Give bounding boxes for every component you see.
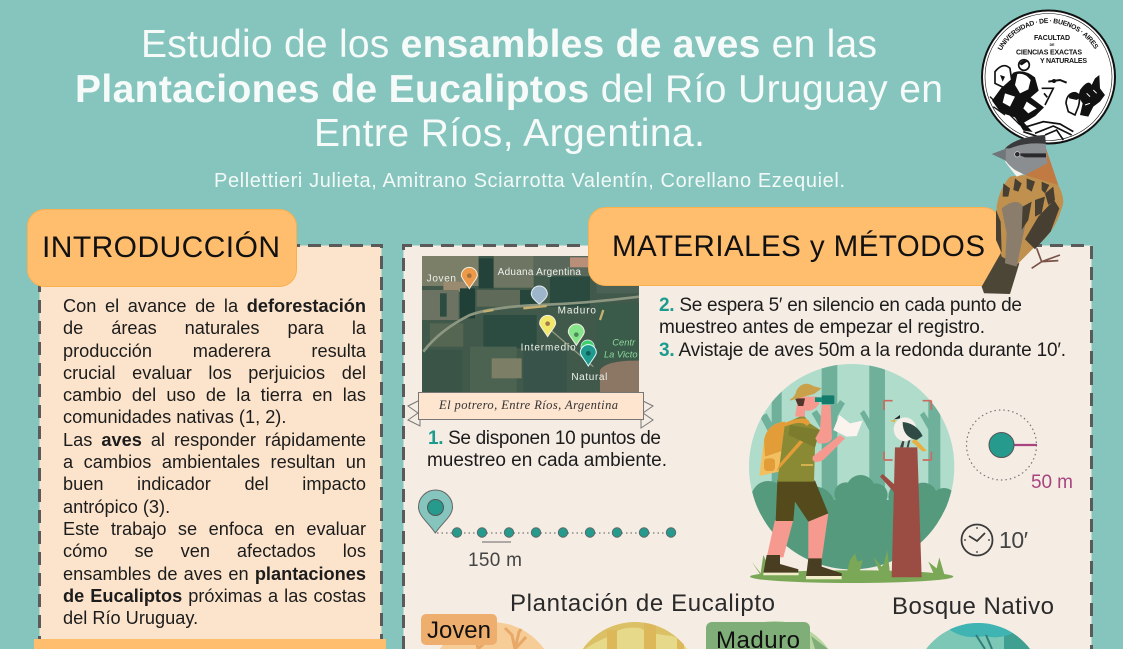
steps 2 and 3 text: 3. Avistaje de aves 50m a la redonda durante 10′.	[659, 340, 1066, 361]
habitat circle: intermedio	[582, 622, 687, 649]
logo: facultad de ciencias exactas y naturales	[981, 10, 1116, 144]
habitat circle: maduro	[765, 621, 828, 649]
text block: introducción: a cambios ambientales resultan un	[63, 452, 366, 472]
habitat circle: joven	[440, 622, 544, 649]
small bird	[890, 415, 927, 452]
label: joven: Joven	[427, 617, 491, 644]
map: el potrero: Joven	[427, 274, 456, 285]
heading: materiales y métodos	[588, 208, 1000, 286]
next section header band	[34, 639, 386, 649]
title: Entre Ríos, Argentina.	[314, 112, 705, 155]
text block: introducción: Las aves al responder rápidamente	[63, 430, 366, 450]
illustration: perched sparrow	[982, 135, 1063, 294]
text block: introducción: cómo se ven afectados los	[63, 541, 366, 561]
illustration: birdwatcher	[747, 360, 957, 583]
torso and arms	[777, 415, 820, 482]
map: el potrero: Aduana Argentina	[498, 267, 581, 278]
logo: facultad de ciencias exactas y naturales: DE	[1050, 43, 1055, 47]
backpack	[759, 422, 787, 476]
diagram: sampling transect	[418, 490, 676, 571]
text block: introducción: producción maderera resulta	[63, 341, 366, 361]
logo: facultad de ciencias exactas y naturales: Y NATURALES	[1040, 58, 1087, 65]
text block: introducción: de áreas naturales para la	[63, 318, 366, 338]
body	[996, 175, 1063, 265]
wing feathers	[1002, 202, 1025, 267]
text block: introducción	[63, 296, 366, 628]
logo: facultad de ciencias exactas y naturales: FACULTAD	[1034, 35, 1070, 42]
map: el potrero: Natural	[571, 372, 607, 383]
title	[75, 23, 943, 155]
text block: introducción: Con el avance de la deforestación	[63, 296, 366, 316]
steps 2 and 3 text: muestreo antes de empezar el registro.	[659, 317, 985, 338]
text block: introducción: ensambles de aves en plantaciones	[63, 564, 366, 584]
map: el potrero: Centr	[612, 337, 636, 347]
text block: introducción: buen indicador del impacto	[63, 474, 366, 494]
heading: plantación de eucalipto: Plantación de Eucalipto	[510, 590, 775, 617]
text block: introducción: Este trabajo se enfoca en evaluar	[63, 519, 366, 539]
map: el potrero	[422, 256, 639, 392]
text block: introducción: crucial evaluar los perjuicios del	[63, 363, 366, 383]
title: Estudio de los ensambles de aves en las	[141, 23, 877, 66]
title: Plantaciones de Eucaliptos del Río Uruguay en	[75, 68, 943, 111]
head and hat	[795, 397, 819, 417]
diagram: sampling transect: 150 m	[468, 550, 522, 571]
map: el potrero: Maduro	[558, 305, 596, 316]
steps 2 and 3 text: 2. Se espera 5′ en silencio en cada punto de	[659, 295, 1022, 316]
text block: introducción: comunidades nativas (1, 2).	[63, 407, 286, 427]
heading: introducción: INTRODUCCIÓN	[42, 231, 280, 264]
habitat circle: bosque nativo	[926, 623, 1030, 649]
map caption ribbon: El potrero, Entre Ríos, Argentina	[438, 398, 618, 412]
logo: facultad de ciencias exactas y naturales: UNIVERSIDAD · DE · BUENOS · AIRES	[998, 18, 1098, 50]
hiker legs	[767, 513, 828, 560]
tail	[982, 253, 1019, 294]
panel: introducción	[40, 246, 382, 649]
map caption ribbon	[408, 392, 653, 428]
diagram: 50 m radius: 50 m	[1031, 472, 1073, 493]
panel: materiales y métodos	[404, 246, 1092, 649]
step 1 text: 1. Se disponen 10 puntos de	[428, 428, 661, 449]
notebook	[833, 415, 863, 437]
text block: introducción: cambio del uso de la tierra en las	[63, 385, 366, 405]
throat	[1005, 157, 1038, 177]
tree trunk	[880, 447, 922, 577]
orange nape	[1025, 148, 1058, 185]
steps 2 and 3 text	[659, 295, 1066, 361]
step 1 text	[427, 428, 667, 471]
logo: facultad de ciencias exactas y naturales: CIENCIAS EXACTAS	[1016, 50, 1082, 56]
heading: introducción	[28, 210, 296, 286]
icon: clock, 10 minutes	[962, 524, 1028, 556]
label: maduro	[706, 622, 810, 649]
text block: introducción: de Eucaliptos próximas a las costas	[63, 586, 366, 606]
map: el potrero: Intermedio	[521, 343, 576, 354]
text block: introducción: antrópico (3).	[63, 497, 170, 517]
step 1 text: muestreo en cada ambiente.	[427, 450, 667, 471]
legs	[1032, 248, 1060, 268]
head	[1005, 135, 1047, 175]
diagram: 50 m radius	[966, 410, 1073, 493]
icon: clock, 10 minutes: 10′	[999, 527, 1028, 553]
authors: Pellettieri Julieta, Amitrano Sciarrotta Valentín, Corellano Ezequiel.	[214, 170, 845, 192]
map: el potrero: La Victo	[604, 349, 638, 359]
heading: materiales y métodos: MATERIALES y MÉTODOS	[612, 230, 985, 263]
text block: introducción: del Río Uruguay.	[63, 608, 198, 628]
heading: bosque nativo: Bosque Nativo	[892, 593, 1054, 620]
